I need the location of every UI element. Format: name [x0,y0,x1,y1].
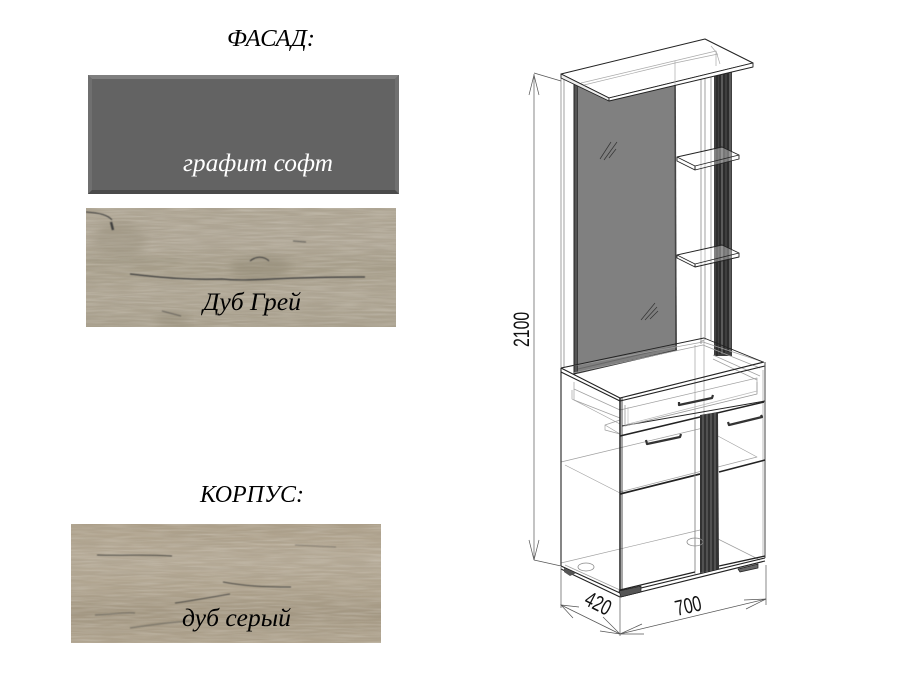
dimension: height 2100 [511,73,561,566]
swatch: grey oak [86,208,396,328]
shelf upper [677,147,739,170]
top shelf [561,39,753,101]
door rails [620,420,765,590]
heading: body: КОРПУС: [199,482,304,508]
swatch: graphite soft [88,75,399,194]
dimension: height 2100: 2100 [511,312,535,347]
dimension: depth 420: 420 [580,588,615,621]
drawer front [620,382,765,436]
furniture drawing: hallway unit [561,39,765,597]
dimension: width 700: 700 [673,592,704,622]
label: graphite soft: графит софт [183,150,333,177]
cabinet outer edges [561,338,765,597]
back panel outlines [561,42,716,368]
label: grey oak: Дуб Грей [201,289,302,316]
swatch: grey oak body [71,524,381,643]
cabinet hidden lines [561,340,763,590]
mirror [574,63,677,374]
dimension: width 700 [620,565,766,634]
cabinet body [561,338,765,597]
shelf lower [677,245,739,267]
mirror glints [600,142,658,320]
label: grey oak body: дуб серый [182,605,292,632]
handles [646,395,762,444]
feet [564,538,758,597]
heading: facade: ФАСАД: [227,26,315,52]
dark slatted column, upper [714,64,732,356]
dark slatted column, lower [700,412,719,573]
dimension: depth 420 [561,567,620,636]
